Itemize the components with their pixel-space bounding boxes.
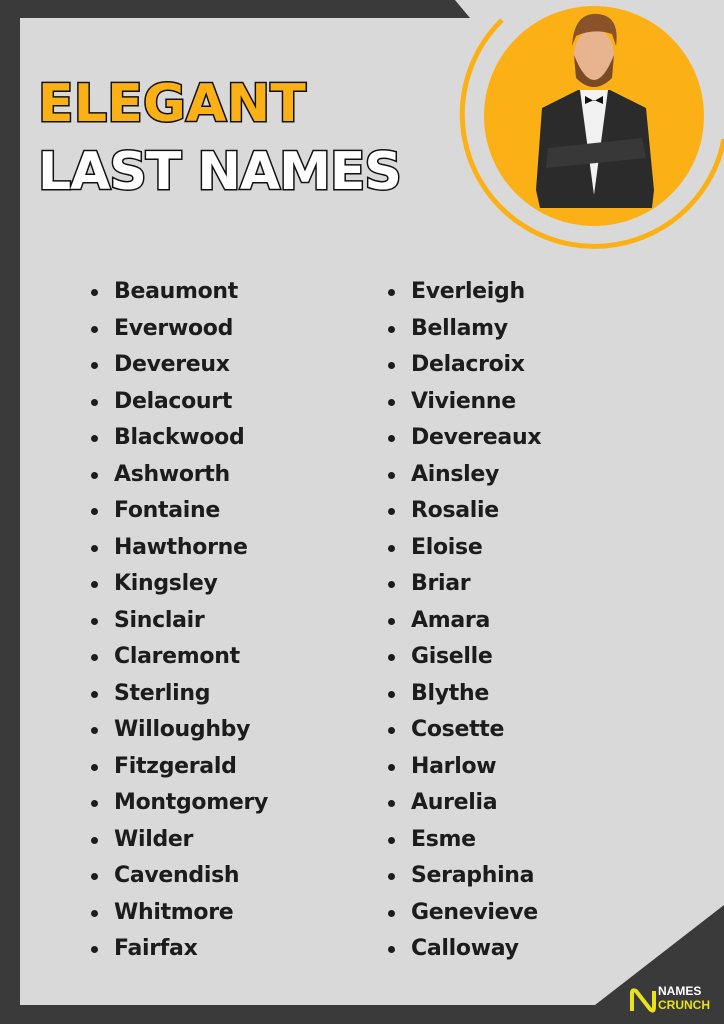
list: column 2: Seraphina	[411, 863, 534, 888]
list: column 1: Fairfax	[114, 936, 197, 961]
logo: Names Crunch: NAMES	[658, 984, 701, 998]
list: column 2: Briar	[411, 571, 470, 596]
list: column 2: Esme	[411, 826, 476, 852]
list: column 2: Vivienne	[411, 388, 516, 414]
list: column 1: Kingsley	[114, 571, 218, 596]
head	[574, 29, 614, 81]
list: column 2: Aurelia	[411, 790, 497, 815]
list: column 1: Ashworth	[114, 462, 230, 486]
list: column 1: Sinclair	[114, 608, 204, 632]
title: ELEGANT: ELEGANT	[38, 74, 306, 134]
list: column 2: Eloise	[411, 534, 482, 560]
list: column 1: Willoughby	[114, 717, 250, 742]
list: column 2: Rosalie	[411, 498, 499, 523]
list: column 1: Blackwood	[114, 425, 244, 450]
jacket	[536, 90, 654, 208]
list: column 1: Cavendish	[114, 863, 239, 888]
list: column 2: Harlow	[411, 754, 496, 778]
list: column 2: Delacroix	[411, 352, 525, 377]
list: column 1: Delacourt	[114, 388, 232, 414]
list: column 2: Bellamy	[411, 316, 508, 340]
list: column 2	[388, 279, 542, 961]
list: column 2: Ainsley	[411, 462, 499, 486]
list: column 2: Everleigh	[411, 279, 525, 304]
illustration: man in circle	[460, 6, 724, 249]
list: column 2: Giselle	[411, 644, 493, 669]
list: column 2: Cosette	[411, 717, 504, 742]
list: column 1: Claremont	[114, 644, 240, 669]
list: column 2: Amara	[411, 608, 490, 632]
list: column 1: Hawthorne	[114, 534, 248, 560]
title: LAST NAMES: LAST NAMES	[38, 142, 401, 202]
list: column 2: Blythe	[411, 680, 489, 706]
list: column 1: Fitzgerald	[114, 754, 237, 778]
list: column 1: Sterling	[114, 680, 210, 706]
logo: Names Crunch: CRUNCH	[658, 998, 710, 1012]
list: column 1: Everwood	[114, 316, 233, 340]
list: column 2: Calloway	[411, 936, 519, 961]
logo: Names Crunch	[630, 984, 710, 1013]
list: column 1: Whitmore	[114, 900, 233, 924]
list: column 1	[91, 279, 268, 961]
list: column 2: Devereaux	[411, 425, 541, 450]
list: column 1: Fontaine	[114, 498, 220, 523]
list: column 1: Wilder	[114, 826, 193, 852]
list: column 1: Beaumont	[114, 279, 238, 304]
list: column 1: Montgomery	[114, 790, 268, 815]
list: column 1: Devereux	[114, 352, 230, 377]
list: column 2: Genevieve	[411, 900, 538, 924]
